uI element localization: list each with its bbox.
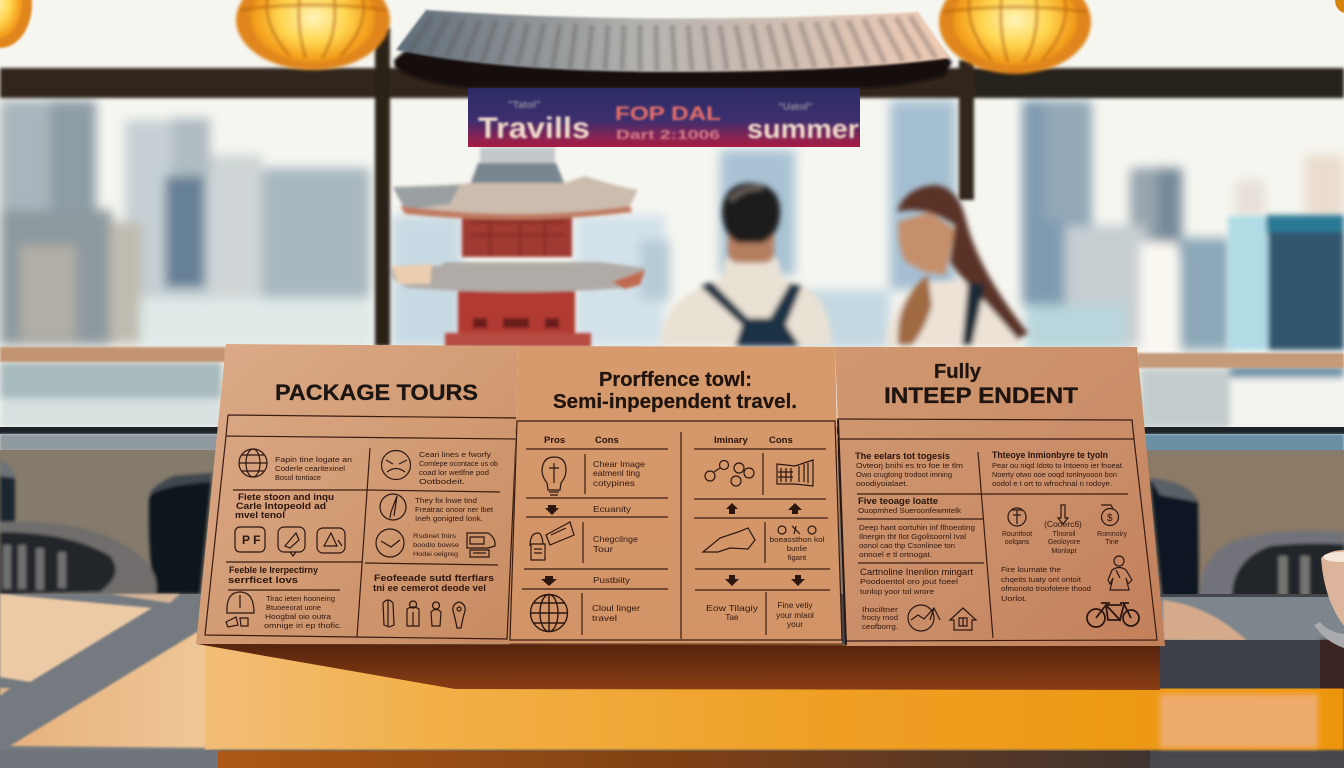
- text: icon captions: [1002, 519, 1127, 555]
- lantern right: [939, 0, 1091, 74]
- lantern corner: [0, 0, 32, 48]
- text: bold lower right: [373, 573, 494, 593]
- text: top left: [275, 455, 352, 482]
- icon: tickets: [530, 522, 574, 560]
- text: block 3: [859, 523, 975, 559]
- panel: package tours: [196, 344, 518, 644]
- banner: Dart 2:1006: [616, 127, 720, 142]
- icon: building: [777, 460, 813, 486]
- text: block 4: tunlop yoor tol wrore: [860, 587, 934, 596]
- icons: three rounded boxes: [235, 527, 345, 556]
- banner: FOP DAL: [615, 104, 721, 125]
- text: lower left small: Btuoeeorat uone: [266, 603, 321, 612]
- icons: three rounded boxes: P F: [242, 533, 260, 547]
- text: icon captions: Monlapt: [1052, 548, 1077, 555]
- text: top right: Ceari lines e fworfy: [419, 450, 491, 459]
- icon: coin with dollar: $: [1107, 513, 1113, 524]
- text: block 3: Ilnergin tht Ilot Ggolisoornl Ival: [859, 532, 966, 541]
- text: lower left small: Hoogbal oio outra: [265, 612, 332, 621]
- column headers: Iminary: [714, 435, 749, 446]
- text: block 1: [855, 451, 963, 488]
- text: block 5: Ihociltner: [862, 605, 899, 614]
- text: row 3 right: figant: [788, 553, 807, 562]
- text: block 1: The eelars tot togesis: [855, 451, 950, 461]
- balcony railing and lower view: [0, 347, 1344, 454]
- heading: semi-independent: Prorffence towl:: [599, 369, 752, 391]
- text: block 4: Cartnoline Inenlion mingart: [860, 567, 974, 577]
- text: row 3 right: boeassthon kol: [770, 535, 825, 544]
- chair left back: [0, 460, 15, 522]
- text: row 3 right: bunlie: [787, 544, 807, 553]
- travellers: [660, 183, 1028, 346]
- text: lower left small: omnige iri ep thofic.: [264, 621, 342, 630]
- heading: package tours: PACKAGE TOURS: [275, 380, 478, 405]
- text: block 5: [862, 605, 899, 631]
- heading: semi-independent: Semi-inpependent travel.: [553, 391, 797, 413]
- text: block 2: Five teoage loatte: [858, 496, 938, 506]
- banner: summer: [747, 114, 860, 144]
- text: bottom right: Fine vetiy: [777, 601, 813, 610]
- icon: globe: [239, 449, 267, 477]
- icon: pin: [380, 494, 406, 520]
- bright orange band: [205, 645, 1344, 750]
- label: row 4: Pustbiity: [593, 575, 631, 585]
- text: block 1: ooodiyoialaet.: [856, 479, 908, 488]
- chair round right: [1200, 530, 1344, 597]
- text: bold middle left: mvel tenol: [235, 510, 285, 520]
- text: icon captions: Romnoiry: [1097, 531, 1127, 538]
- sunlit patch right: [1163, 600, 1247, 641]
- text: bold lower left: [228, 565, 318, 585]
- banner: [468, 88, 860, 147]
- chair round left: [0, 522, 157, 594]
- text: block 5: frociy rnod: [862, 613, 898, 622]
- right sunlit band: [1160, 694, 1318, 748]
- heading: semi-independent: [553, 369, 797, 413]
- label: row 2: Ecuanity: [593, 504, 632, 514]
- text: bold lower right: tni ee cemerot deode vel: [373, 583, 486, 593]
- banner: "Uatol": [778, 102, 813, 113]
- text: bold middle left: Carle Intopeold ad: [236, 501, 326, 511]
- text: block 5: ceofborrg.: [862, 622, 898, 631]
- text: bold middle left: Fiete stoon and inqu: [238, 492, 334, 502]
- column headers: Cons: [595, 435, 619, 446]
- saucer: [1314, 622, 1344, 648]
- icon: coin with dollar: [1101, 505, 1118, 526]
- lanterns: [0, 0, 1344, 74]
- text: bottom row: travel: [592, 613, 617, 623]
- arrows row 2: [541, 575, 805, 586]
- temple roof: [394, 10, 952, 88]
- text: block 4: [860, 567, 974, 596]
- text: icon captions: Rountfoot: [1002, 531, 1032, 538]
- heading: fully independent: [884, 361, 1078, 408]
- column headers: Cons: [769, 435, 793, 446]
- text: row 3: [593, 534, 638, 554]
- text: top right: Comlepe ocontace us ob: [419, 459, 498, 468]
- text: bold lower right: Feofeeade sutd fterfiars: [374, 573, 494, 583]
- text: bold middle left: [235, 492, 334, 520]
- text: bottom right: Tae: [725, 613, 739, 622]
- text: block 3: onnoel e tl ortnogat.: [859, 550, 932, 559]
- heading: fully independent: Fully: [934, 361, 982, 383]
- text: bottom right: your mlaol: [776, 611, 814, 620]
- roof tile ribs: [410, 16, 936, 71]
- icon: bicycle: [1087, 603, 1139, 627]
- text: lower left small: Tirac ieten hooneing: [266, 594, 335, 603]
- text: top right: Ootbodeit.: [419, 477, 465, 486]
- text: top right block: Noerty otwo ooe ooqd tonlnyooon bon: [992, 470, 1117, 479]
- text: icon captions: Tine: [1105, 539, 1119, 546]
- icon: clock and shoes: [226, 592, 254, 627]
- icon: down arrow: [1058, 505, 1068, 524]
- wooden table: [0, 594, 1344, 768]
- column headers: [544, 435, 793, 446]
- table grid: [510, 421, 842, 640]
- table front edge: [0, 750, 222, 768]
- icon: world globe: [530, 594, 568, 632]
- panel: semi-independent travel: [510, 346, 842, 644]
- text: top right: coad lor wetlfne pod: [419, 468, 489, 477]
- heading: fully independent: INTEEP ENDENT: [884, 383, 1078, 408]
- text: small middle: Rsdinet fnirs: [413, 533, 457, 540]
- text: icon captions: Geoloyore: [1048, 539, 1080, 546]
- text: lower right: Fire lournate the: [1001, 565, 1061, 574]
- text: block 3: Deep hant oortuhin inf flhoeoting: [859, 523, 975, 532]
- panel: fully independent: [835, 347, 1165, 646]
- table grid: [205, 415, 518, 639]
- table grid: [837, 419, 1157, 641]
- text: small middle: Hodei oeigreg: [413, 551, 458, 558]
- woman: [886, 185, 1028, 346]
- text: top right block: Pear ou niqd Idoto to Intoeno ier fnoeat.: [992, 461, 1124, 470]
- text: block 1: Owo crugtong trodoot imning: [856, 470, 952, 479]
- text: bottom right: Eow Tilagiy: [706, 604, 759, 613]
- sunlit patch left: [0, 594, 220, 748]
- text: middle right: They fix lnwe tind: [415, 496, 477, 505]
- text: middle right: Freatrac onoor ner lbet: [415, 505, 494, 514]
- text: icon captions: Tlnoroil: [1053, 531, 1076, 538]
- text: row 1: [593, 459, 645, 488]
- icon: shoe: [703, 528, 755, 552]
- text: icon captions: oolqans: [1005, 539, 1030, 546]
- text: block 2: [858, 496, 961, 515]
- text: row 3 right: [770, 535, 825, 562]
- text: row 1: cotypines: [593, 478, 635, 488]
- icon: chart circle: [908, 605, 940, 631]
- chairs: [0, 460, 1344, 597]
- banner: "Tatol": [508, 100, 541, 111]
- text: block 3: oonol cao thp Csonlinoe ton: [859, 541, 955, 550]
- text: middle right: [415, 496, 494, 523]
- blurred city skyline: [0, 100, 1344, 350]
- pagoda: [392, 147, 645, 347]
- text: bold lower left: serrficet lovs: [228, 575, 298, 585]
- icon: computer: [467, 533, 495, 557]
- text: block 4: Poodoentol oro jout foeel: [860, 577, 958, 586]
- text: top left: Bosol tontiace: [275, 473, 321, 482]
- text: top right block: Thteoye Inmionbyre te tyoln: [992, 450, 1108, 460]
- text: lower left small: [264, 594, 342, 630]
- text: bottom row: Cloul Iinger: [592, 603, 640, 613]
- cup: [1321, 550, 1344, 626]
- text: lower right: chqeits tuaty ont ontoit: [1001, 575, 1082, 584]
- blue building: [1228, 215, 1344, 350]
- text: top right block: [992, 450, 1124, 488]
- text: top right block: oodol e t ort to wfrochnal n rodoye.: [992, 479, 1112, 488]
- text: row 3: Chegcilnge: [593, 534, 638, 544]
- window frame beams and posts: [0, 28, 1344, 346]
- text: lower right: ofmonoto troofotere thood: [1001, 584, 1091, 593]
- text: block 1: Ovteorj bnihi es tro foe te tlm: [856, 461, 963, 470]
- text: middle right: Ineh gonigted lonk.: [415, 514, 483, 523]
- window view background: [0, 0, 1344, 430]
- wall: [0, 450, 1344, 596]
- icon: traveller: [1108, 556, 1132, 590]
- banner: Travills: [478, 112, 590, 145]
- coffee cup: [1314, 550, 1344, 648]
- text: small middle: boodlo bowse: [413, 542, 459, 549]
- text: bottom right: [706, 601, 814, 629]
- text: top right: [419, 450, 498, 486]
- text: icon captions: (Cooerc6): [1044, 519, 1082, 529]
- man: [660, 183, 832, 346]
- arrows row 1: [545, 503, 802, 515]
- icon: face: [382, 450, 410, 480]
- text: row 1: eatmenl ting: [593, 468, 640, 478]
- text: top left: Coderle cearitexinel: [275, 464, 345, 473]
- text: bottom row: [592, 603, 640, 623]
- small icons: [778, 526, 816, 534]
- text: row 1: Chear Image: [593, 459, 645, 469]
- text: lower right: Uorlot.: [1001, 594, 1027, 603]
- column headers: Pros: [544, 435, 565, 446]
- icons: people: [383, 600, 465, 628]
- chair dark left: [149, 473, 212, 594]
- text: small middle: [413, 533, 459, 558]
- icon: coin: [1008, 508, 1026, 526]
- lantern left: [236, 0, 390, 70]
- text: block 2: Ouopmhed Sueroonfewmtelk: [858, 506, 961, 515]
- icon: cluster of circles: [705, 460, 754, 486]
- icon: house: [950, 608, 976, 630]
- text: bold lower left: Feeble le Irerpectirny: [229, 565, 318, 575]
- text: bottom right: your: [787, 620, 803, 629]
- icon: envelope circle: [376, 529, 404, 557]
- text: top left: Fapin tine logate an: [275, 455, 352, 464]
- icon: light bulb: [542, 457, 566, 495]
- text: row 3: Tour: [593, 544, 613, 554]
- card shadow band: [197, 644, 1165, 690]
- chair dark right: [1150, 478, 1199, 597]
- text: lower right: [1001, 565, 1091, 603]
